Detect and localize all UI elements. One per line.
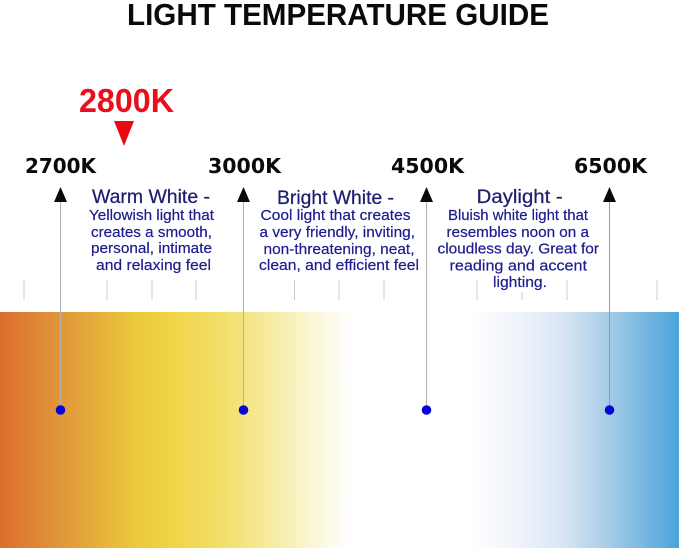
line: 3000K: [242, 200, 244, 410]
description: Warm White: Yellowish light that: [89, 208, 214, 224]
line: 2700K: [60, 200, 62, 410]
description: Daylight: cloudless day. Great for: [438, 242, 599, 258]
line: 6500K: [608, 200, 610, 410]
label: 6500K: 6500K: [574, 154, 649, 178]
description: Bright White: non-threatening, neat,: [264, 242, 414, 258]
dot: [605, 405, 614, 415]
description: Bright White: [259, 208, 419, 274]
description: Bright White: a very friendly, inviting,: [260, 225, 415, 241]
icon: up arrow: [237, 187, 250, 202]
label: 3000K: 3000K: [208, 154, 283, 178]
icon: up arrow: [54, 187, 67, 202]
highlighted 2800K marker: [79, 82, 174, 146]
description: Daylight: lighting.: [493, 275, 547, 291]
2800K label: 2800K: [79, 82, 174, 119]
icon: up arrow: [420, 187, 433, 202]
line: 4500K: [426, 200, 428, 410]
description: Warm White: creates a smooth,: [91, 225, 212, 241]
description: Bright White: clean, and efficient feel: [259, 258, 419, 274]
description: Daylight: Bluish white light that: [448, 208, 588, 224]
description: Daylight: [438, 208, 599, 291]
heading: Bright White: Bright White -: [277, 188, 394, 209]
text block: Daylight: [438, 187, 599, 291]
text block: Bright White: [259, 188, 419, 274]
colour temperature spectrum: [0, 312, 679, 548]
description: Daylight: reading and accent: [450, 258, 587, 274]
description: Bright White: Cool light that creates: [260, 208, 410, 224]
icon: up arrow: [603, 187, 616, 202]
description: Warm White: [89, 208, 214, 274]
icon: red down arrow: [114, 121, 134, 146]
marker: 4500K: [391, 154, 466, 415]
marker: 2700K: [25, 154, 97, 415]
dot: [239, 405, 248, 415]
heading: Warm White: Warm White -: [92, 187, 210, 208]
description: Warm White: and relaxing feel: [96, 258, 211, 274]
description: Warm White: personal, intimate: [91, 241, 212, 257]
label: 4500K: 4500K: [391, 154, 466, 178]
heading: Daylight: Daylight -: [477, 187, 563, 208]
marker: 3000K: [208, 154, 283, 415]
dot: [56, 405, 65, 415]
dot: [422, 405, 431, 415]
label: 2700K: 2700K: [25, 154, 97, 178]
scale tick marks: [24, 280, 657, 300]
description: Daylight: resembles noon on a: [446, 225, 590, 241]
text block: Warm White: [89, 187, 214, 274]
marker: 6500K: [574, 154, 649, 415]
